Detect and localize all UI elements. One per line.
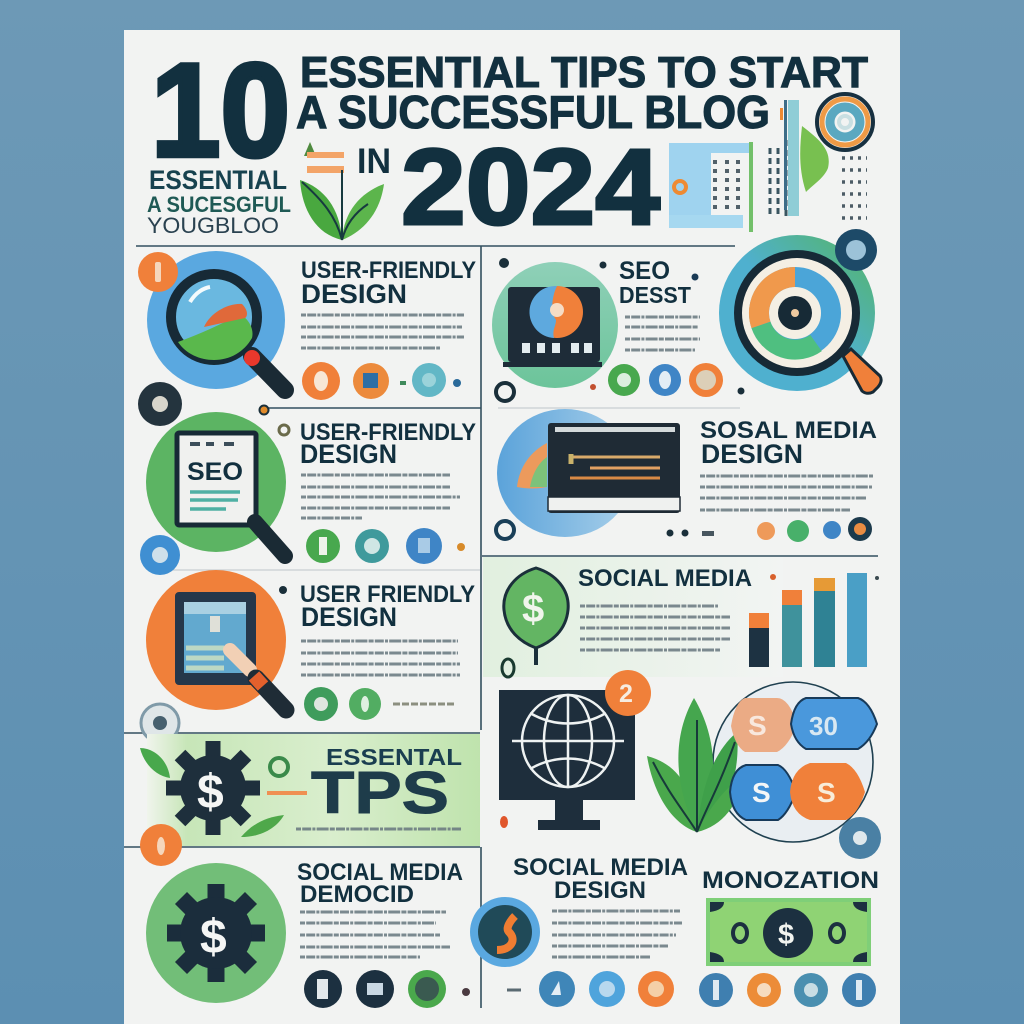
subtitle block: YOUGBLOO (147, 213, 279, 238)
panel: tip 4: DESIGN (701, 439, 803, 469)
icon: banknote: $ (778, 919, 794, 951)
icon: money bubbles: S (817, 777, 836, 808)
icon: tablet on orange circle (146, 570, 286, 710)
text block (552, 911, 682, 957)
heading: SOCIAL MEDIA (297, 859, 463, 886)
icon: header chart collage (669, 100, 867, 232)
text block (301, 475, 460, 518)
heading: MONOZATION (702, 867, 879, 894)
icon row (141, 586, 455, 742)
title number 10: 10 (151, 37, 290, 185)
header (147, 37, 873, 247)
icon: gear on green circle (140, 824, 286, 1003)
heading: ESSENTAL (326, 744, 462, 770)
icon: money bubbles (730, 698, 881, 859)
subtitle block (147, 165, 291, 238)
subtitle block: ESSENTIAL (149, 165, 287, 195)
subtitle block: A SUCESGFUL (147, 192, 291, 217)
panel: tip 6 (141, 570, 475, 742)
panel: essential tips banner: TPS (311, 760, 449, 826)
icon: gear on green circle: $ (200, 911, 227, 964)
icon row (496, 517, 872, 542)
text block (296, 828, 461, 830)
icon: header target (817, 94, 873, 150)
icon: small ring (270, 758, 288, 776)
panel background (483, 557, 783, 677)
panel: tip 4 (496, 409, 877, 542)
heading: USER-FRIENDLY (301, 257, 476, 284)
banner background (147, 734, 480, 846)
icon: dollar pin (502, 568, 568, 677)
panel: tip 2 (492, 229, 881, 401)
panel: tip 1: DESIGN (301, 279, 407, 309)
title year 2024: 2024 (401, 126, 660, 247)
title line 2: A SUCCESSFUL BLOG (296, 86, 770, 138)
title word in: IN (357, 142, 391, 181)
panel: tip 7 (140, 824, 470, 1008)
icon row (306, 528, 465, 564)
icon: banknote (706, 898, 871, 966)
icon: monitor on blue shape (497, 409, 680, 537)
panel: tip 6: DESIGN (301, 602, 397, 632)
panel: tip 7: DEMOCID (300, 881, 414, 908)
text block (301, 315, 464, 348)
icon: target magnifier (719, 229, 881, 393)
icon: plant (647, 698, 743, 832)
icon: money bubbles: 30 (809, 711, 838, 741)
icon: magnifier on blue circle (138, 251, 285, 426)
heading: SEO (619, 257, 670, 285)
text block (580, 606, 730, 650)
heading: USER-FRIENDLY (300, 419, 476, 446)
text block (700, 476, 873, 510)
text block (625, 317, 700, 350)
bar chart (749, 573, 879, 667)
icon row (304, 970, 470, 1008)
icon: ring behind bubbles (713, 682, 873, 842)
panel: tip 1 (138, 251, 476, 426)
icon: money bubbles: S (752, 777, 771, 808)
panel: tip 3 (140, 406, 476, 575)
text block (301, 641, 460, 675)
icon row (302, 362, 461, 400)
icon: header leaf plant (300, 142, 384, 240)
icon: dollar pin: $ (522, 587, 544, 631)
text block (300, 912, 450, 957)
heading: SOSAL MEDIA (700, 417, 877, 444)
panel: tip 8: DESIGN (554, 877, 646, 904)
icon: S badge (470, 897, 540, 967)
icon: SEO tablet on green circle: SEO (187, 458, 243, 486)
panel: tip 3: DESIGN (300, 439, 397, 469)
icon row (507, 971, 674, 1007)
icon: gear with dollar (166, 741, 260, 835)
icon row (699, 973, 876, 1007)
icon: money bubbles: S (748, 710, 767, 741)
poster panel (124, 30, 900, 1024)
panel: monetization (699, 867, 879, 1007)
title line 1: ESSENTIAL TIPS TO START (300, 48, 868, 97)
icon: leaf small (241, 815, 284, 837)
panel: tip 2: DESST (619, 282, 691, 308)
icon: SEO tablet on green circle (140, 406, 289, 575)
heading: USER FRIENDLY (300, 581, 475, 608)
icon: globe monitor (499, 670, 651, 830)
icon: gear with dollar: $ (197, 766, 224, 819)
panel: tip 8 (470, 854, 688, 1007)
icon: globe monitor: 2 (619, 680, 633, 708)
panel: monitor and leaf (499, 670, 881, 859)
icon: laptop (492, 262, 618, 388)
panel: essential tips banner (140, 734, 480, 846)
icon: leaf (140, 748, 170, 778)
arrow marks (267, 791, 307, 795)
divider lines (124, 246, 878, 1008)
heading: SOCIAL MEDIA (578, 565, 752, 592)
icon row (496, 258, 744, 401)
heading: SOCIAL MEDIA (513, 854, 688, 881)
panel: tip 5 social media chart (483, 557, 879, 677)
